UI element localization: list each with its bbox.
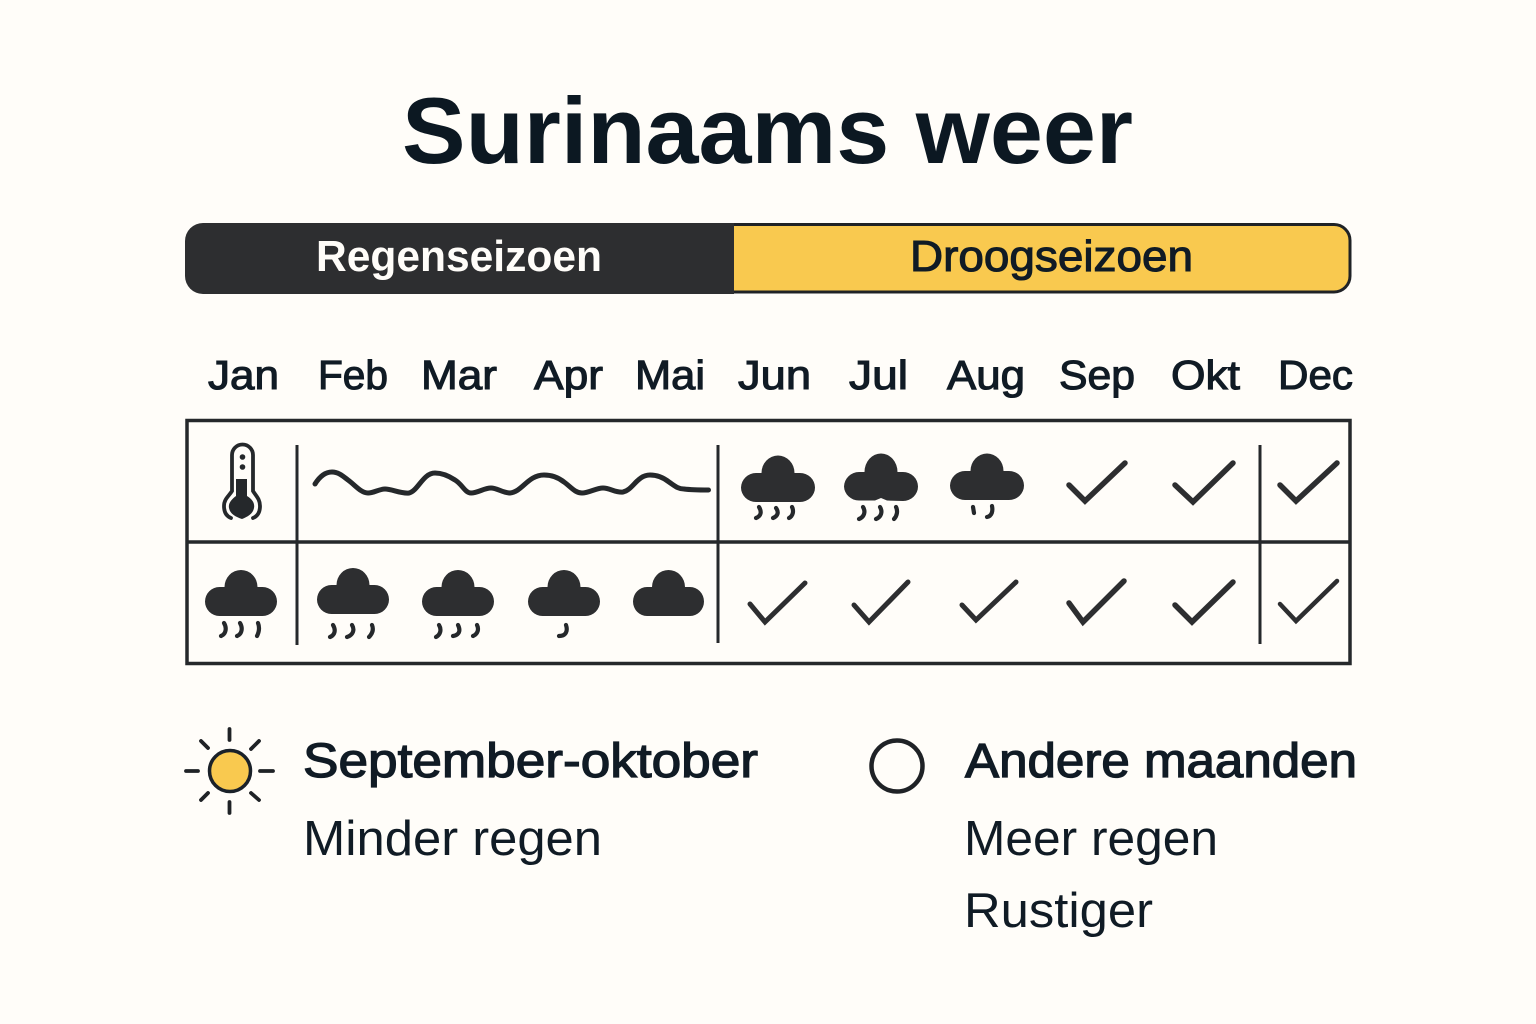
title: Surinaams weer [402, 78, 1133, 183]
icon: cloud with rain, Jun [741, 456, 815, 518]
text: Rustiger: Rustiger [964, 884, 1153, 938]
icon: cloud with rain, Mar [422, 570, 494, 637]
legend: Andere maanden [872, 735, 1357, 938]
icon: check, Dec [1280, 463, 1337, 501]
rainy season segment: Regenseizoen [316, 232, 602, 281]
icon: check, Okt [1175, 463, 1233, 502]
season bar [185, 223, 1350, 294]
month labels: Sep [1059, 352, 1135, 398]
icon: check, Jun [750, 583, 805, 622]
icon: cloud with rain, Feb [317, 568, 389, 637]
icon: check, Sep [1069, 463, 1125, 501]
icon: check, Jul [854, 582, 908, 622]
icon: thermometer [224, 445, 260, 519]
month labels: Apr [534, 352, 603, 398]
month labels [208, 352, 1353, 398]
month labels: Mai [635, 352, 705, 398]
month labels: Aug [947, 352, 1025, 398]
heading: September-oktober: September-oktober [303, 735, 758, 788]
text: Minder regen: Minder regen [303, 812, 602, 866]
dry season segment: Droogseizoen [910, 232, 1193, 281]
icon: cloud with light rain, Aug [950, 454, 1024, 517]
text: Meer regen: Meer regen [964, 812, 1218, 866]
rainy season segment [185, 223, 734, 294]
month labels: Feb [318, 352, 388, 398]
month labels: Jun [738, 352, 811, 398]
icon: check, Dec [1280, 581, 1337, 621]
icon: cloud with rain, Jul [844, 454, 918, 519]
month labels: Mar [421, 352, 497, 398]
icon: cloud with rain, Jan [205, 570, 277, 636]
wave line [315, 472, 708, 493]
icon: check, Okt [1175, 582, 1233, 622]
icon: empty circle [872, 740, 922, 792]
month labels: Jan [208, 352, 279, 398]
icon: cloud with light rain, Apr [528, 570, 600, 636]
weather table [187, 420, 1350, 664]
icon: check, Sep [1069, 581, 1124, 622]
dry season segment [700, 224, 1350, 292]
month labels: Okt [1171, 352, 1241, 398]
icon: sun [186, 729, 273, 813]
month labels: Jul [849, 352, 908, 398]
heading: Andere maanden: Andere maanden [965, 735, 1357, 788]
month labels: Dec [1278, 352, 1353, 398]
icon: check, Aug [962, 582, 1016, 620]
legend: September-oktober [186, 729, 758, 866]
icon: cloud, Mai [633, 570, 704, 616]
